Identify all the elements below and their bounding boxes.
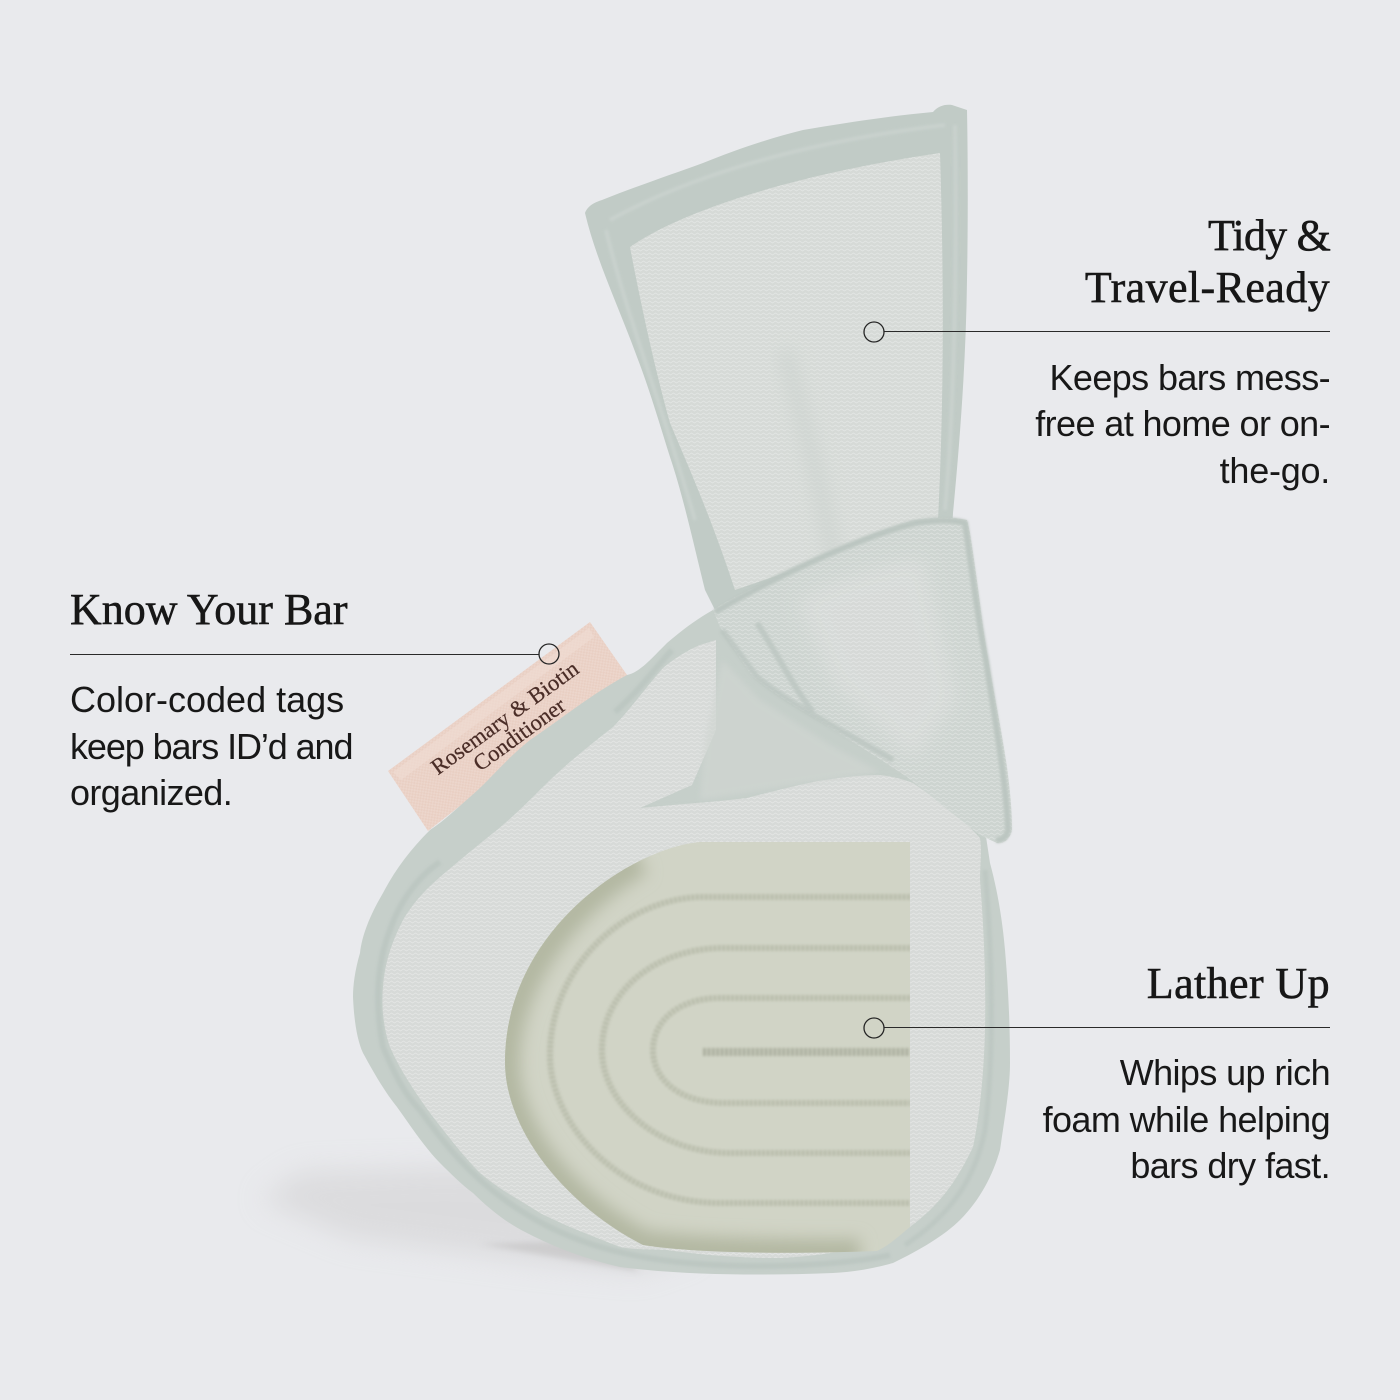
callout heading: Tidy & [1208, 211, 1331, 260]
ground shadow [260, 1167, 700, 1272]
flap hem highlight [606, 125, 956, 520]
callout heading: Travel-Ready [1085, 263, 1330, 312]
pouch body [353, 610, 1010, 1275]
callout body: the-go. [1220, 450, 1330, 491]
body mesh panel [382, 640, 985, 1258]
body hem dark stripes [378, 650, 890, 1266]
callout body: foam while helping [1043, 1099, 1330, 1140]
leader line [70, 644, 559, 664]
tag label: Rosemary & Biotin [426, 656, 583, 780]
callout heading: Know Your Bar [70, 585, 348, 634]
callout body: Color-coded tags [70, 679, 344, 720]
callout body: keep bars ID’d and [70, 726, 352, 767]
front band [713, 518, 1012, 843]
neck wedge softening [700, 660, 880, 800]
callout body: bars dry fast. [1130, 1145, 1330, 1186]
band fold lines [722, 623, 893, 760]
pouch illustration [353, 105, 1012, 1275]
soap ridges [550, 897, 910, 1203]
callout body: Whips up rich [1120, 1052, 1330, 1093]
leader line [864, 1018, 1330, 1038]
callout body: Keeps bars mess- [1049, 357, 1330, 398]
upper flap [585, 105, 968, 620]
leader line [864, 322, 1330, 342]
callout: Lather Up [864, 959, 1330, 1186]
callout body: organized. [70, 772, 232, 813]
flap fold [785, 350, 835, 565]
band hem [715, 520, 1008, 840]
callout body: free at home or on- [1035, 403, 1330, 444]
callout: Tidy & Travel-Ready [864, 211, 1331, 491]
callout heading: Lather Up [1147, 959, 1330, 1008]
callout: Know Your Bar [70, 585, 559, 813]
band light centre [797, 557, 957, 760]
soap bar [505, 842, 910, 1254]
flap mesh panel [630, 153, 943, 590]
tag label: Conditioner [468, 692, 570, 776]
soap edge shading [505, 860, 860, 1254]
color-coded tag [388, 622, 627, 831]
